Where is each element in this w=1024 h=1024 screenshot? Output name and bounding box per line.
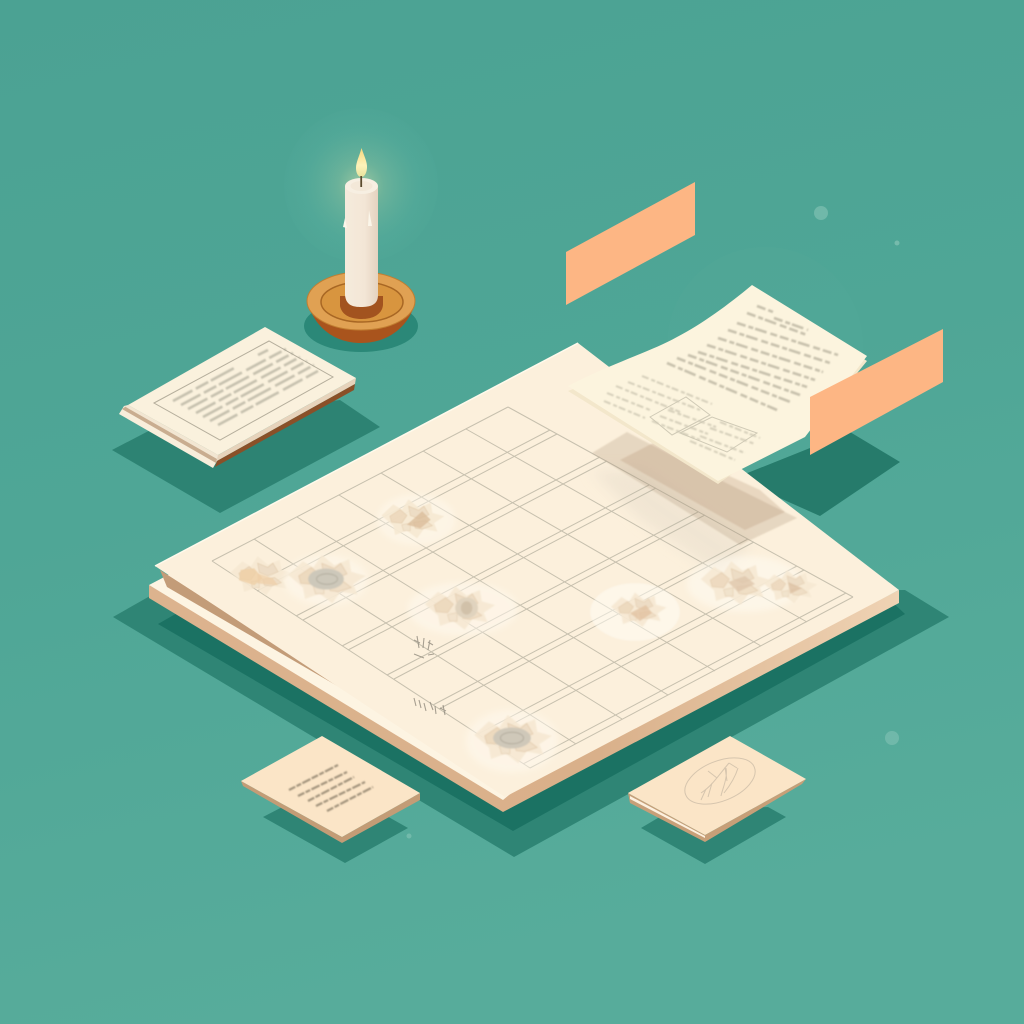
booklet right edge [217,378,356,461]
large sheet shadow [113,590,949,857]
halo behind floating page [667,247,863,443]
peach banner top [566,182,695,305]
floating page surface [568,285,867,481]
soft fall-off under floating page [590,470,750,575]
floating page table outlines [650,397,757,452]
calendar grid [212,407,853,768]
small card left shadow [263,803,408,863]
booklet cover [128,327,356,455]
lower sheet edge [149,585,899,812]
card right surface [628,736,806,835]
small card right [628,736,806,842]
large sheet stack [149,343,899,812]
floating page shadow on background [735,432,900,516]
candle [284,108,438,352]
icon: leaf sketch [678,749,762,813]
shadow of floating page on sheet [592,432,797,545]
booklet text frame [154,341,333,440]
flower: right pair [687,556,817,612]
sheet annotations [414,636,446,715]
floating page underlayer [568,290,867,484]
flower: translucent dish [591,584,679,640]
floating page faint tables [604,376,760,460]
left booklet [119,327,356,468]
booklet bottom page [119,406,220,468]
floating page text [667,306,838,410]
flower: upper [377,494,455,545]
candle flame [356,148,367,187]
flower: left grey centre [284,555,368,605]
candle body [343,178,378,307]
small card right shadow [641,807,786,864]
candle bowl [304,272,418,352]
card left surface [241,736,420,837]
booklet middle layer [122,405,218,463]
background dots [406,206,900,838]
flower: left orange [230,556,293,595]
main sheet surface [155,343,899,797]
card left edges [241,781,420,843]
flower: centre [408,582,518,636]
flower: bottom grey centre [466,710,558,773]
upper sheet underside [160,570,370,705]
booklet text [173,349,318,425]
main sheet highlight [155,343,578,566]
lower sheet surface [149,574,515,800]
floating page [568,285,867,484]
small card left [241,736,420,843]
peach banner right [810,329,943,455]
left booklet shadow [112,400,380,513]
candle glow [284,108,438,262]
card left text [289,765,373,811]
card right edges [628,779,806,842]
